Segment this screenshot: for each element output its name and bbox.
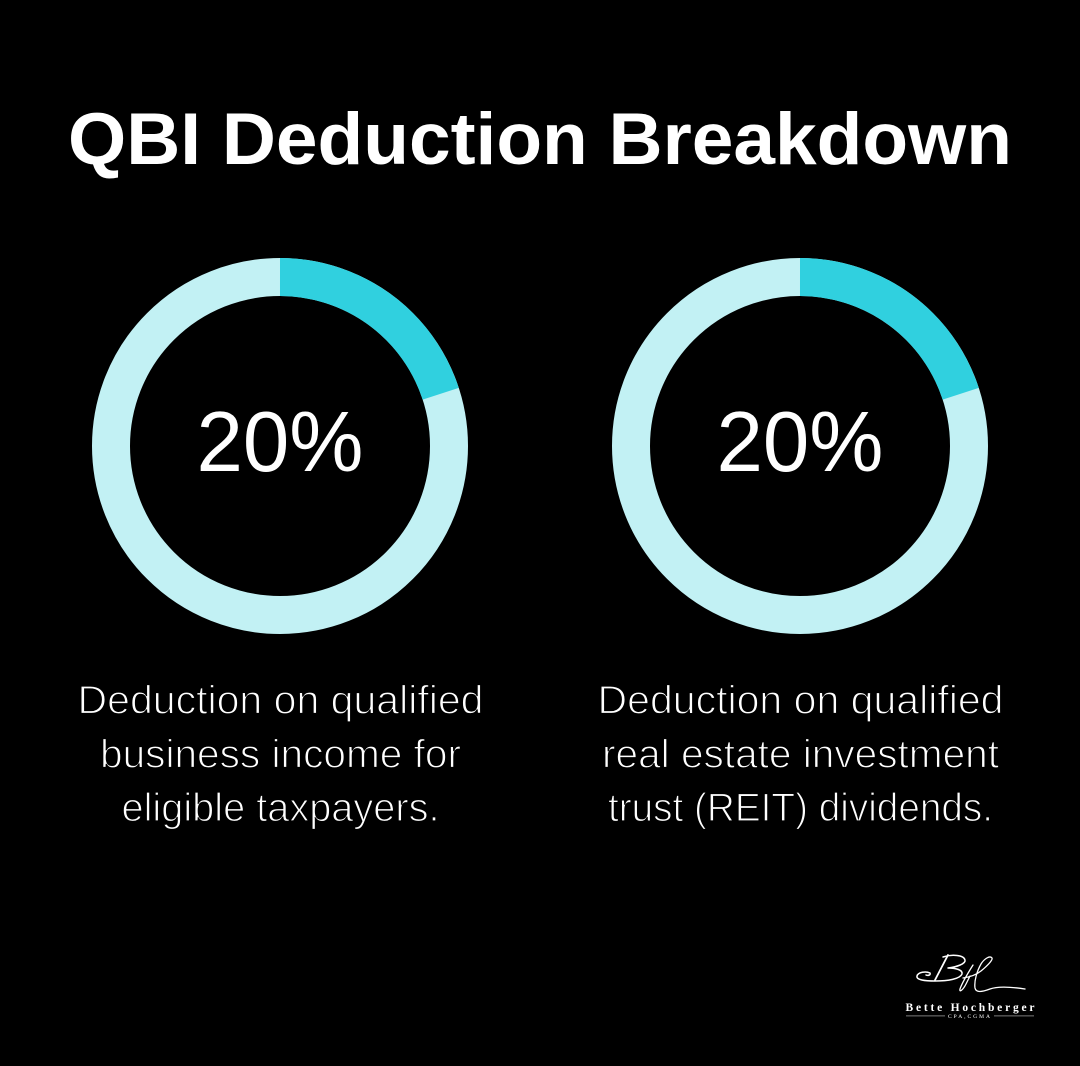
logo credentials: CPA,CGMA	[948, 1014, 990, 1020]
description: business income	[78, 678, 484, 830]
donut chart: 20% of REIT dividends	[631, 277, 969, 615]
description: REIT dividends: real estate investment	[602, 732, 999, 776]
description: REIT dividends: trust (REIT) dividends.	[608, 786, 993, 830]
description: REIT dividends	[598, 678, 1004, 830]
logo: Bette Hochberger signature	[906, 955, 1034, 1020]
description: business income: eligible taxpayers.	[122, 786, 440, 830]
icon: BH monogram	[917, 955, 1025, 992]
logo name: Bette Hochberger	[906, 1002, 1034, 1014]
panel: REIT dividends	[598, 277, 1004, 830]
value: 20%: 20%	[196, 395, 364, 490]
title: QBI Deduction Breakdown	[68, 99, 1012, 180]
description: REIT dividends: Deduction on qualified	[598, 678, 1004, 722]
description: business income: business income for	[100, 732, 461, 776]
panel: qualified business income	[78, 277, 484, 830]
donut chart: 20% of business income	[111, 277, 449, 615]
description: business income: Deduction on qualified	[78, 678, 484, 722]
value: 20%: 20%	[716, 395, 884, 490]
